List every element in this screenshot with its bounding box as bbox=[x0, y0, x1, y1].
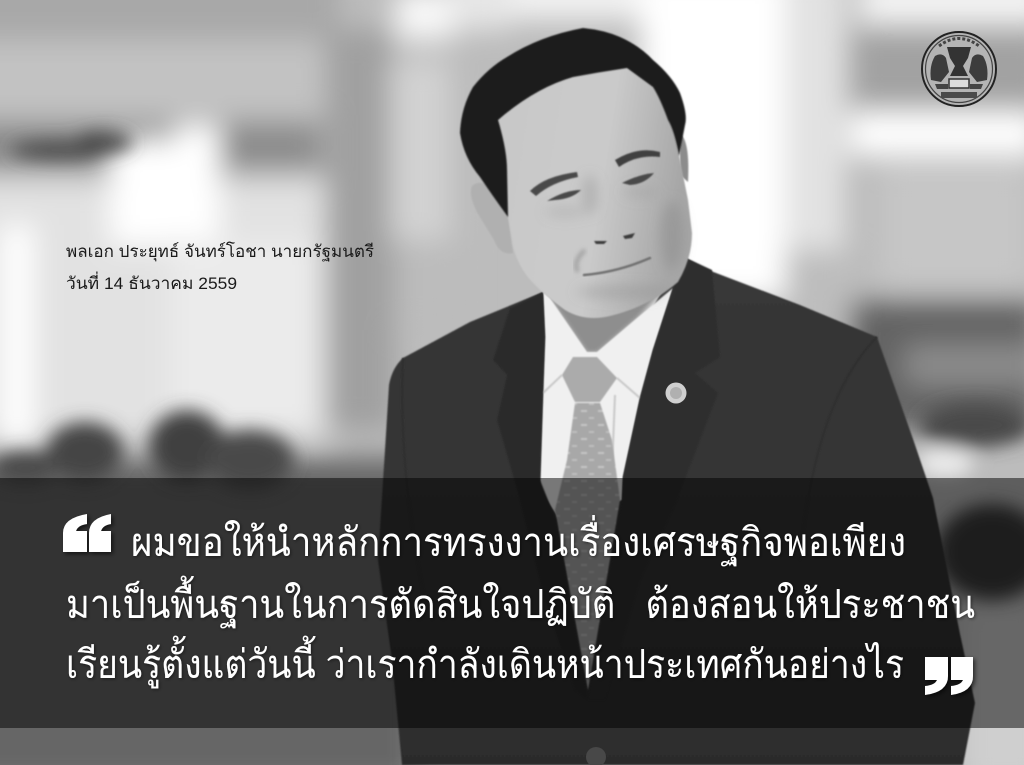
lapel badge bbox=[666, 382, 686, 404]
date: วันที่ 14 ธันวาคม 2559 bbox=[66, 271, 237, 293]
shirt collar shadow bbox=[543, 375, 640, 470]
facial features bbox=[530, 150, 660, 275]
opening quotation mark bbox=[63, 514, 111, 552]
jacket button bbox=[586, 747, 606, 765]
far ear bbox=[680, 134, 688, 182]
face shading bbox=[545, 175, 684, 299]
suit jacket bbox=[378, 256, 975, 765]
portrait: man in suit bbox=[378, 28, 975, 765]
face bbox=[498, 66, 692, 318]
right lapel bbox=[588, 256, 720, 700]
neck bbox=[545, 270, 680, 352]
quote text bbox=[66, 515, 975, 688]
tie bbox=[555, 357, 620, 690]
closing quotation mark bbox=[925, 657, 973, 695]
speaker name: พลเอก ประยุทธ์ จันทร์โอชา นายกรัฐมนตรี bbox=[66, 241, 374, 262]
quote line 3: เรียนรู้ตั้งแต่วันนี้ ว่าเรากำลังเดินหน้าประเทศกันอย่างไร bbox=[66, 635, 904, 688]
ear bbox=[471, 183, 513, 253]
quote line 1: ผมขอให้นำหลักการทรงงานเรื่องเศรษฐกิจพอเพียง bbox=[131, 515, 906, 567]
left lapel bbox=[493, 292, 588, 700]
caption: speaker and date bbox=[66, 241, 374, 293]
suit seam shading bbox=[402, 337, 877, 600]
seal of the Prime Minister's office bbox=[921, 31, 997, 107]
shirt bbox=[540, 288, 673, 520]
hair bbox=[460, 28, 686, 217]
dark quote band bbox=[0, 478, 1024, 728]
